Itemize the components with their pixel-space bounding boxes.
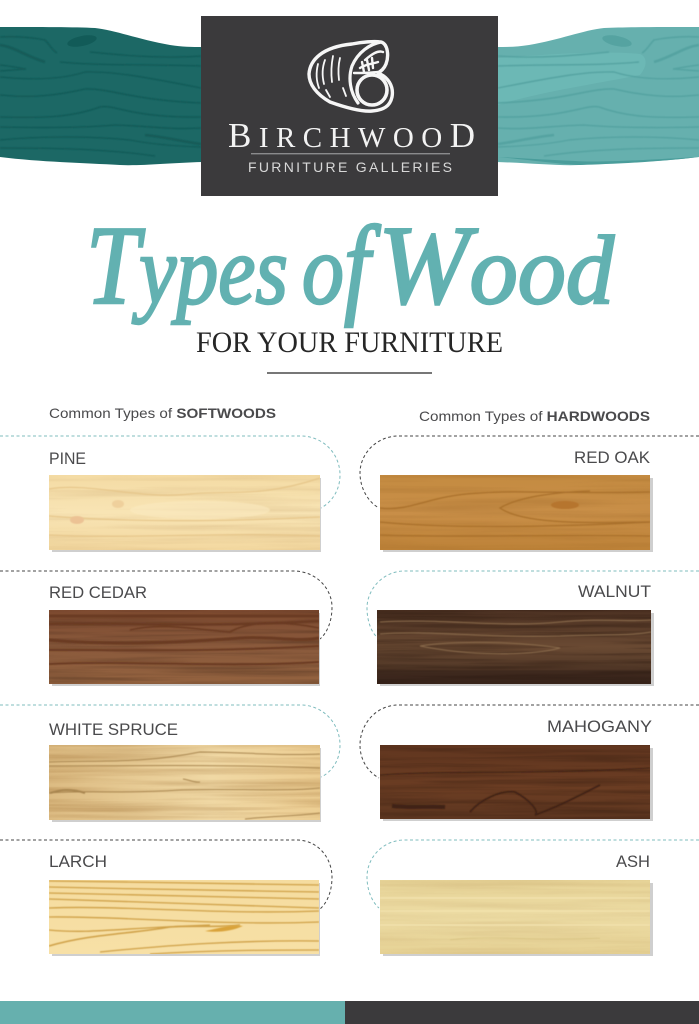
brand tagline: FURNITURE GALLERIES [248,159,452,175]
panel: walnut [377,582,654,686]
panel: mahogany [380,717,653,821]
heading: softwoods: Common Types of SOFTWOODS [49,405,276,421]
title: Types of Wood: Wood [378,204,615,328]
panel: ash: ASH [616,852,650,871]
right light teal wood plank [497,27,699,165]
dashed connector: larch [0,840,332,909]
dashed connector: ash [367,840,699,908]
title: Types of Wood: of [302,204,382,328]
footer bar [0,1001,699,1024]
panel: white spruce: WHITE SPRUCE [49,720,178,739]
logo panel [201,16,498,196]
panel: white spruce [49,720,321,822]
panel: pine: PINE [49,449,86,468]
dashed connector: white spruce [0,705,340,777]
dashed connector: red oak [360,436,699,508]
panel: red cedar: RED CEDAR [49,583,147,602]
dashed connector: walnut [367,571,699,637]
panel: walnut: WALNUT [578,582,651,601]
panel: ash [380,852,653,956]
panel: larch: LARCH [49,852,107,871]
brand name: B IRCHWOOD [228,116,475,155]
title: Types of Wood [86,204,615,328]
panel: pine [49,449,321,552]
panel: mahogany: MAHOGANY [547,717,652,736]
heading: hardwoods: Common Types of HARDWOODS [419,408,650,424]
subtitle: FOR YOUR FURNITURE [196,326,503,359]
panel: red cedar [49,583,320,686]
dashed connector: red cedar [0,571,332,639]
title: Types of Wood: Types [86,204,288,328]
panel: larch [49,852,320,956]
left dark teal wood plank [0,27,202,165]
panel: red oak: RED OAK [574,448,651,467]
icon: birch log logo [309,42,392,111]
panel: red oak [380,448,653,552]
dashed connector: pine [0,436,340,508]
dashed connector: mahogany [360,705,699,778]
